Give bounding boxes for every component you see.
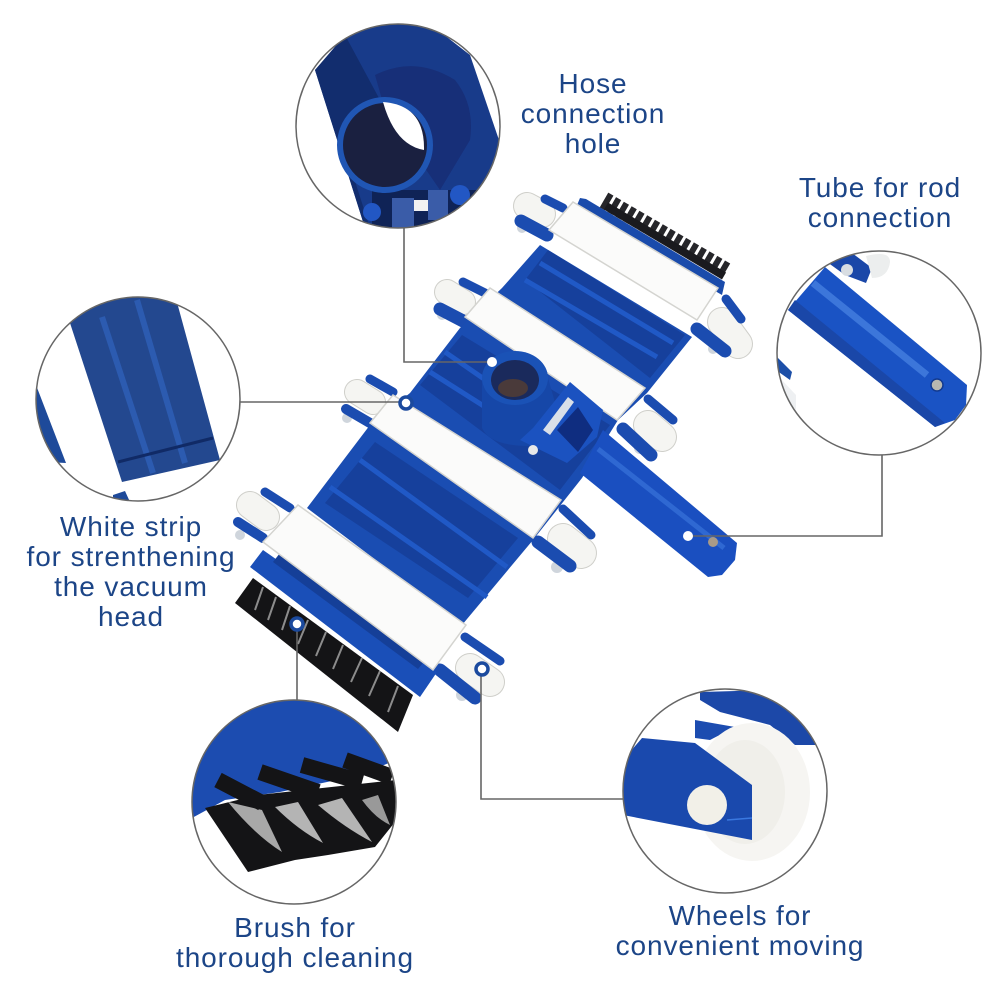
hose connector xyxy=(482,351,560,446)
label: white strip: for strenthening xyxy=(27,541,235,572)
detail circle: white strip xyxy=(36,295,240,502)
bottom brush xyxy=(235,578,413,732)
label: white strip: the vacuum xyxy=(54,571,208,602)
pointer dots xyxy=(291,357,693,675)
label: white strip: head xyxy=(98,601,164,632)
wheel pins xyxy=(235,223,718,701)
bottom plate xyxy=(250,550,437,697)
body ribs xyxy=(330,263,673,597)
white strips xyxy=(263,202,718,670)
connector lines xyxy=(240,228,882,799)
label: brush: Brush for xyxy=(234,912,356,943)
label: hose connection hole: hole xyxy=(565,128,621,159)
detail circle: rod tube xyxy=(776,250,981,455)
detail circle: wheel xyxy=(623,689,827,893)
label: brush: thorough cleaning xyxy=(176,942,414,973)
blue body xyxy=(307,245,692,625)
label: tube for rod connection: Tube for rod xyxy=(799,172,961,203)
wheel outlines xyxy=(250,206,738,682)
vacuum head product xyxy=(235,198,741,732)
label: tube for rod connection: connection xyxy=(808,202,952,233)
label: hose connection hole: Hose xyxy=(559,68,627,99)
label: wheels: convenient moving xyxy=(616,930,864,961)
wheels xyxy=(250,206,738,682)
wheel brackets xyxy=(238,199,741,698)
detail circle: hose connection hole xyxy=(296,20,500,230)
recessed panels xyxy=(325,250,685,598)
label: hose connection hole: connection xyxy=(521,98,665,129)
rod tube handle xyxy=(520,382,737,577)
detail circle: brush xyxy=(192,700,396,904)
label: wheels: Wheels for xyxy=(669,900,811,931)
top brush xyxy=(604,200,728,276)
label: white strip: White strip xyxy=(60,511,202,542)
top plate xyxy=(575,198,725,295)
